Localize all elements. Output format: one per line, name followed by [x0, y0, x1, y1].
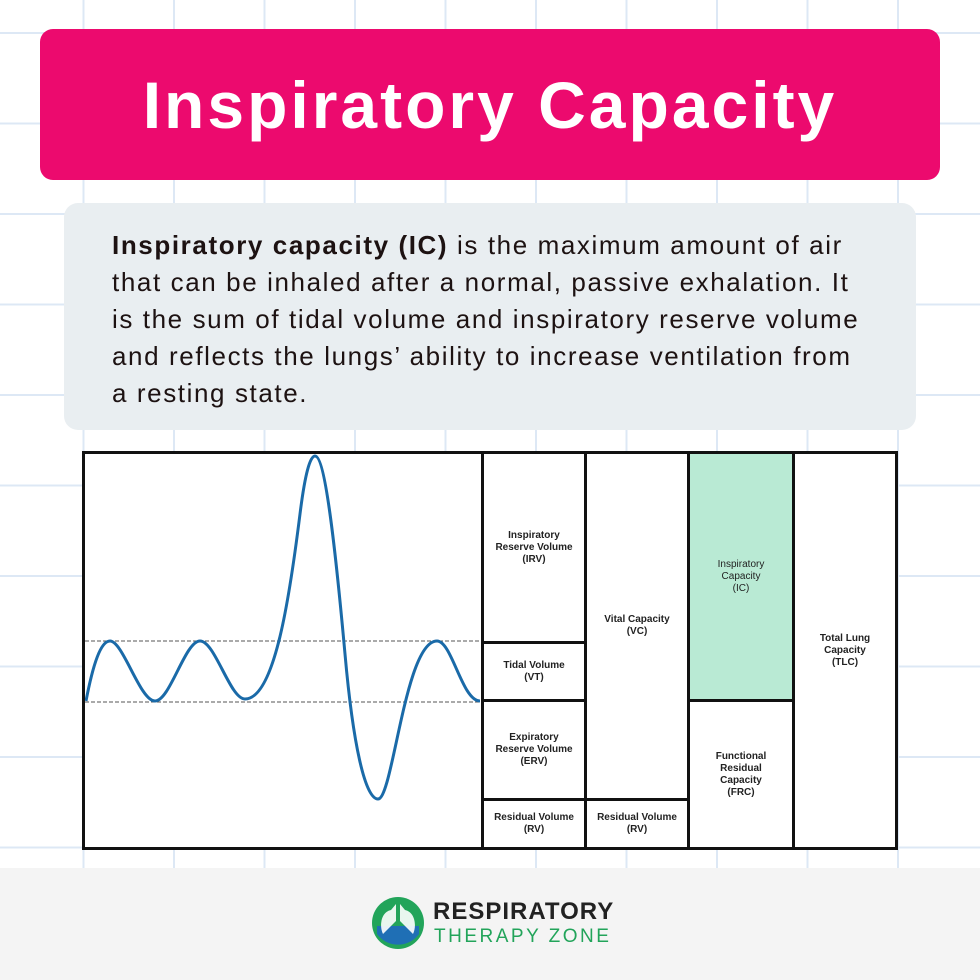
lung volume chart: (RV) [524, 824, 544, 835]
column: IRV/VT/ERV/RV: Reserve Volume [495, 542, 573, 552]
lung volume chart: (FRC) [727, 786, 755, 798]
logo: RESPIRATORY [433, 898, 614, 925]
definition text block: a resting state. [112, 378, 308, 408]
definition text block: and reflects the lungs’ ability to increase ventilation from [112, 341, 852, 371]
column: IRV/VT/ERV/RV: Inspiratory [508, 530, 560, 540]
footer [0, 868, 980, 980]
column: IC/FRC: Capacity [722, 570, 760, 582]
lung volume chart: (ERV) [520, 756, 548, 767]
spirogram wave panel [82, 451, 484, 850]
lung volume chart: Residual Volume [494, 812, 574, 823]
definition text block [64, 203, 916, 430]
column: VC/RV: Vital Capacity [604, 614, 670, 625]
column: IC/FRC: (IC) [733, 582, 749, 594]
logo: THERAPY ZONE [434, 926, 611, 947]
lung volume chart: Capacity [720, 774, 762, 786]
lung volume chart: Residual Volume [597, 812, 677, 823]
title banner [40, 29, 940, 180]
lung volume chart [82, 451, 898, 850]
column: TLC: Total Lung [820, 632, 870, 644]
lung volume chart: Functional [716, 750, 766, 762]
wave line [86, 456, 480, 799]
lung volume chart: (RV) [627, 824, 647, 835]
column: IC/FRC [687, 451, 795, 702]
column: IRV/VT/ERV/RV: (IRV) [522, 554, 546, 564]
definition text block: Inspiratory capacity (IC) is the maximum amount of air [112, 230, 843, 260]
lung volume chart: Reserve Volume [495, 744, 573, 755]
lung volume chart: Expiratory [509, 732, 559, 743]
column: TLC [792, 451, 898, 850]
column: IC/FRC: Inspiratory [718, 558, 764, 570]
title banner: Inspiratory Capacity [143, 68, 837, 142]
lung volume chart: (VT) [524, 672, 544, 682]
column: VC/RV: (VC) [627, 626, 647, 637]
column: TLC: (TLC) [832, 656, 858, 668]
column: IRV/VT/ERV/RV [481, 451, 587, 644]
logo [372, 897, 614, 949]
icon: lungs [372, 897, 424, 949]
column: VC/RV [584, 451, 690, 801]
lung volume chart: Residual [720, 762, 762, 774]
definition text block: that can be inhaled after a normal, passive exhalation. It [112, 267, 849, 297]
definition text block: is the sum of tidal volume and inspiratory reserve volume [112, 304, 859, 334]
lung volume chart: Tidal Volume [503, 660, 565, 670]
column: TLC: Capacity [824, 644, 866, 656]
